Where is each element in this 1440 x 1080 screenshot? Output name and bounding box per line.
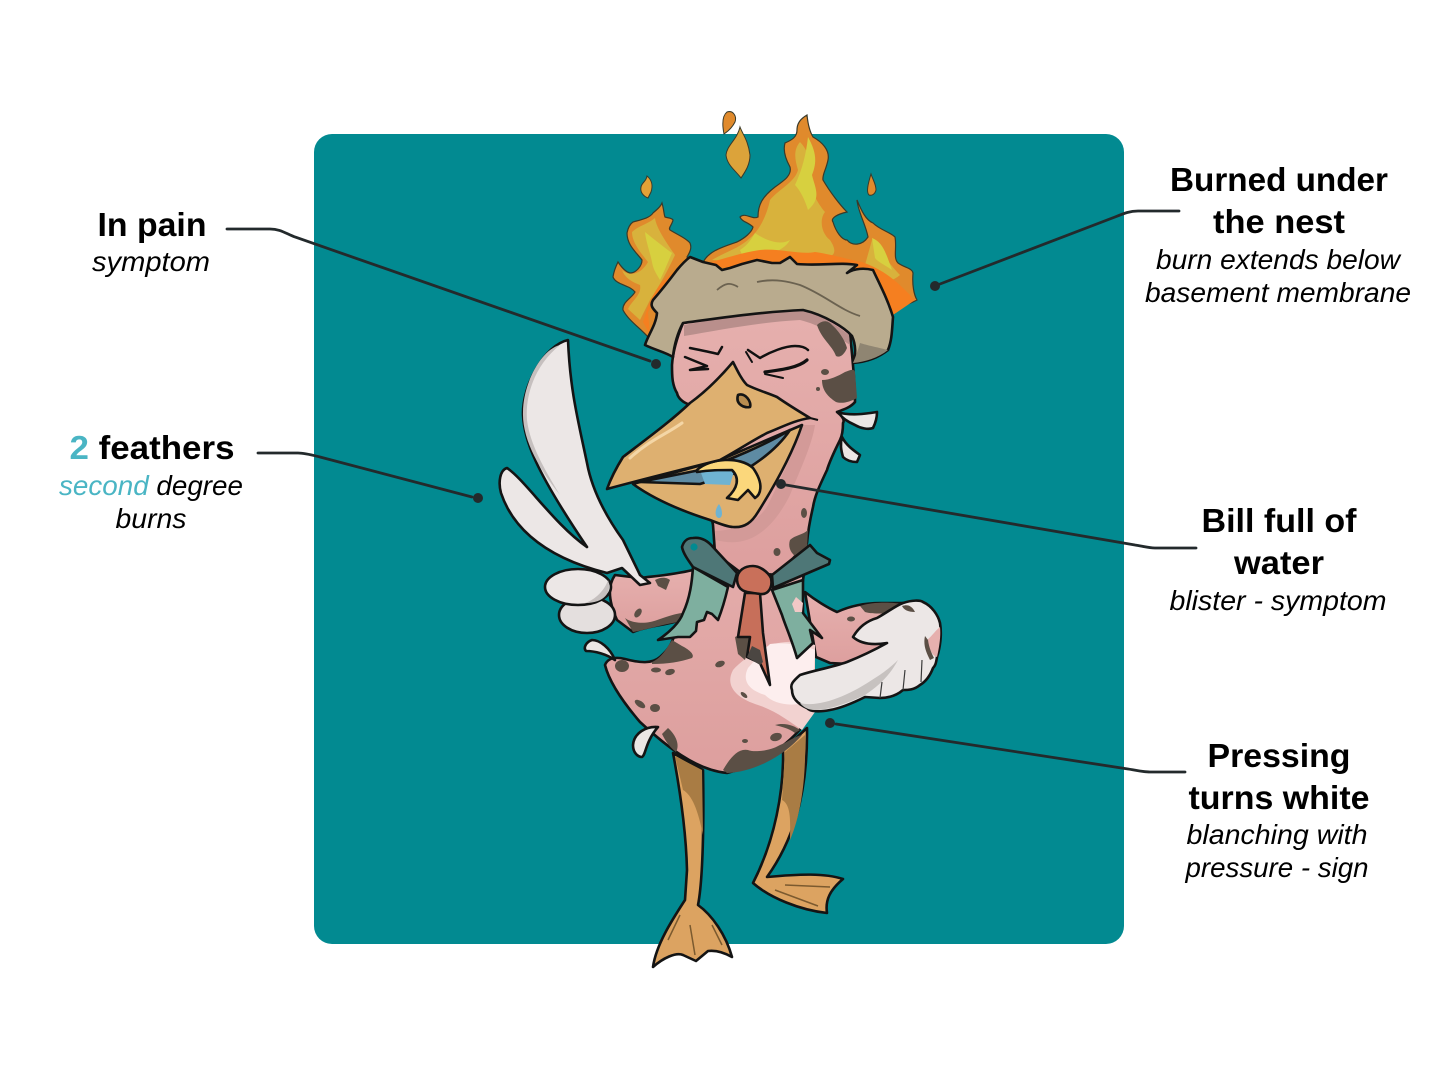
burn patches on head <box>774 321 857 556</box>
label: burned under the nest: basement membrane <box>1145 277 1411 308</box>
label: 2 feathers <box>59 429 243 534</box>
label: pressing turns white: Pressing <box>1208 737 1350 774</box>
tail feathers <box>585 412 877 757</box>
closed angry eyes <box>685 346 808 378</box>
right arm <box>805 592 925 665</box>
callout: in pain leader line <box>227 229 661 369</box>
label: bill full of water: water <box>1233 544 1324 581</box>
label: in pain <box>92 206 210 277</box>
shirt collar <box>658 538 830 658</box>
right leg <box>753 728 843 913</box>
flame droplets <box>723 112 736 134</box>
label: bill full of water <box>1170 502 1386 616</box>
duck bill <box>607 362 818 527</box>
label: in pain: In pain <box>98 206 206 243</box>
label: bill full of water: Bill full of <box>1202 502 1358 539</box>
callout: pressing leader line <box>825 718 1185 772</box>
flames <box>613 112 917 337</box>
burn patches on body <box>615 636 802 773</box>
label: burned under the nest: Burned under <box>1170 161 1388 198</box>
label: burned under the nest: the nest <box>1213 203 1345 240</box>
nest hat <box>645 257 893 363</box>
head and neck <box>672 308 857 575</box>
blanched pressing area <box>730 642 815 730</box>
left leg <box>653 753 732 967</box>
callout: bill leader line <box>776 479 1196 548</box>
label: pressing turns white <box>1185 737 1370 883</box>
white feather fingers <box>500 340 650 633</box>
label: pressing turns white: pressure - sign <box>1185 852 1368 883</box>
white feather hand pressing chest <box>791 601 941 711</box>
panel: teal background <box>314 134 1124 944</box>
label: pressing turns white: blanching with <box>1186 819 1368 850</box>
label: 2 feathers: second degree <box>59 470 243 501</box>
callout: burned leader line <box>930 211 1179 291</box>
label: 2 feathers: burns <box>116 503 186 534</box>
left arm <box>610 570 693 632</box>
label: in pain: symptom <box>92 246 210 277</box>
callout: feathers leader line <box>258 453 483 503</box>
neck tie <box>737 566 771 685</box>
illustration: burned duck <box>500 112 941 967</box>
label: burned under the nest <box>1145 161 1411 308</box>
label: burned under the nest: burn extends below <box>1156 244 1402 275</box>
body <box>605 500 812 773</box>
label: bill full of water: blister - symptom <box>1170 585 1386 616</box>
label: pressing turns white: turns white <box>1188 779 1370 816</box>
label: 2 feathers: 2 feathers <box>70 429 234 466</box>
